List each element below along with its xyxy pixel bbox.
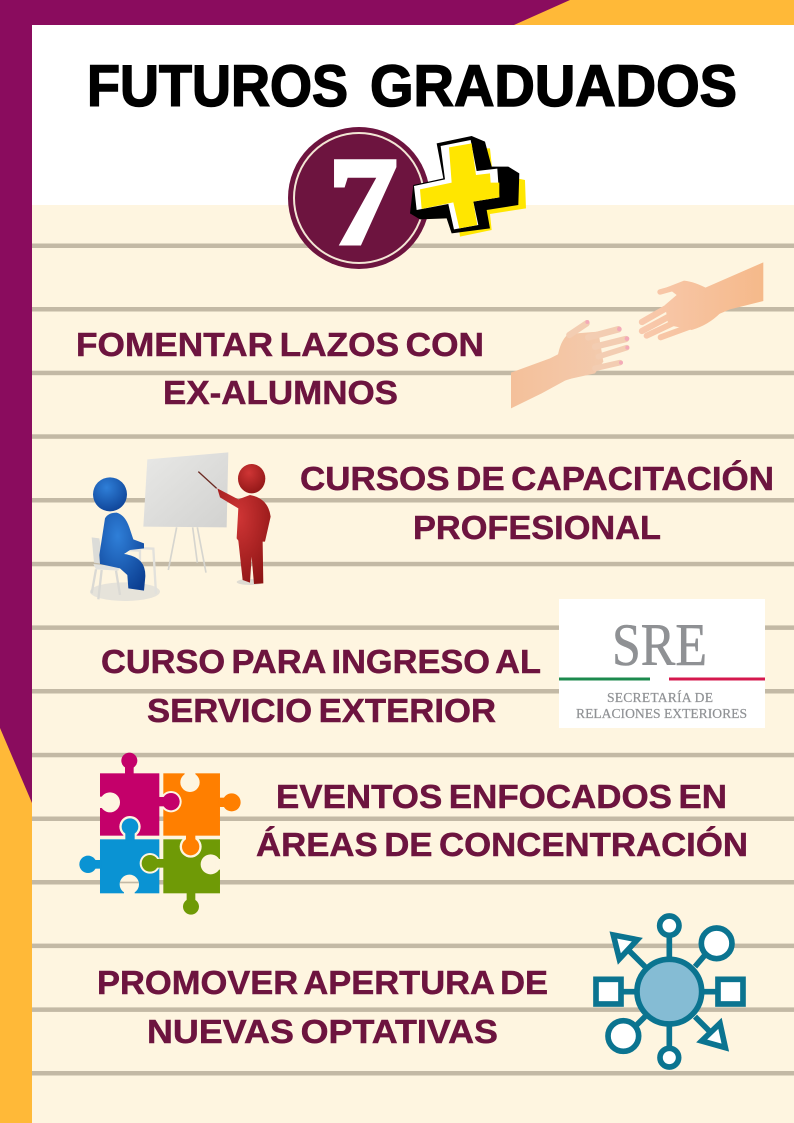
logo: SRE (559, 599, 765, 728)
orange top corner (514, 0, 794, 25)
icon: number seven circle: 7 (329, 133, 397, 270)
section 5 text: NUEVAS OPTATIVAS (147, 1013, 498, 1050)
section 4 text: EVENTOS ENFOCADOS EN (276, 778, 727, 815)
logo: SRE: RELACIONES EXTERIORES (576, 706, 747, 721)
title: GRADUADOS (370, 54, 737, 119)
orange knob into green (180, 836, 202, 858)
title (87, 54, 737, 119)
section 1 text (76, 326, 484, 411)
green piece (163, 839, 220, 915)
badge: 7 plus (288, 127, 526, 270)
orange piece (163, 773, 241, 836)
orange left corner (0, 728, 32, 1123)
icon: plus sign (410, 136, 526, 237)
section 2 text: CURSOS DE CAPACITACIÓN (300, 460, 774, 497)
white title panel (32, 25, 794, 205)
section 5 text (97, 964, 548, 1050)
green knob into blue (140, 853, 160, 874)
icon: network hub (596, 916, 743, 1067)
section 3 text: CURSO PARA INGRESO AL (101, 643, 541, 680)
section 2 text (300, 460, 774, 546)
icon: number seven circle (288, 127, 430, 270)
blue piece (79, 839, 159, 893)
logo: SRE: SECRETARÍA DE (607, 689, 713, 705)
section 1 text: EX-ALUMNOS (163, 374, 398, 411)
section 4 text: ÁREAS DE CONCENTRACIÓN (256, 826, 748, 863)
magenta piece (100, 753, 159, 836)
section 3 text: SERVICIO EXTERIOR (147, 692, 496, 729)
blue knob into magenta (119, 816, 141, 837)
section 5 text: PROMOVER APERTURA DE (97, 964, 548, 1001)
magenta knob into orange (160, 791, 182, 812)
logo: SRE: SRE (612, 612, 707, 678)
section 2 text: PROFESIONAL (413, 509, 661, 546)
icon: teacher and student (90, 452, 271, 601)
section 1 text: FOMENTAR LAZOS CON (76, 326, 484, 363)
title: FUTUROS (87, 54, 348, 119)
icon: reaching hands (511, 262, 763, 408)
cream notebook panel (32, 205, 794, 1123)
section 4 text (256, 778, 748, 863)
section 3 text (101, 643, 541, 729)
icon: puzzle (79, 753, 241, 915)
